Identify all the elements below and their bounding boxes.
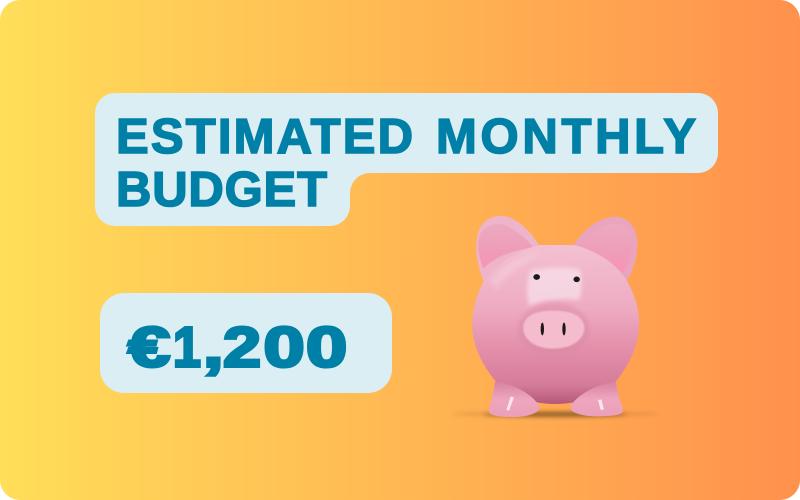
amount value: 1 <box>173 316 201 379</box>
foot highlights <box>506 397 604 411</box>
heading: estimated monthly budget: BUDGET <box>116 163 327 217</box>
amount value: , <box>203 316 224 379</box>
heading: estimated monthly budget: MONTHLY <box>436 110 696 164</box>
amount background <box>100 293 392 393</box>
amount value: 0 <box>264 316 305 379</box>
snout <box>518 303 590 357</box>
right foot <box>570 382 623 416</box>
heading: estimated monthly budget <box>116 110 696 217</box>
left nostril <box>541 323 544 335</box>
forehead highlight <box>527 267 582 306</box>
amount value: 2 <box>223 316 261 379</box>
pig shadow <box>452 412 658 417</box>
heading: estimated monthly budget: ESTIMATED <box>116 110 413 164</box>
icon: piggy bank <box>452 216 658 417</box>
right nostril <box>562 323 566 335</box>
amount value: € <box>128 316 170 379</box>
heading background shape <box>95 93 718 226</box>
amount value: 0 <box>306 316 347 379</box>
panel: heading <box>95 93 718 226</box>
left ear <box>476 216 540 282</box>
panel: amount <box>100 293 392 393</box>
amount value <box>128 316 347 379</box>
left foot <box>489 382 540 417</box>
right eye <box>573 276 580 282</box>
body <box>472 245 639 404</box>
right ear <box>573 217 637 283</box>
left eye <box>533 274 540 280</box>
body sheen <box>490 253 540 290</box>
